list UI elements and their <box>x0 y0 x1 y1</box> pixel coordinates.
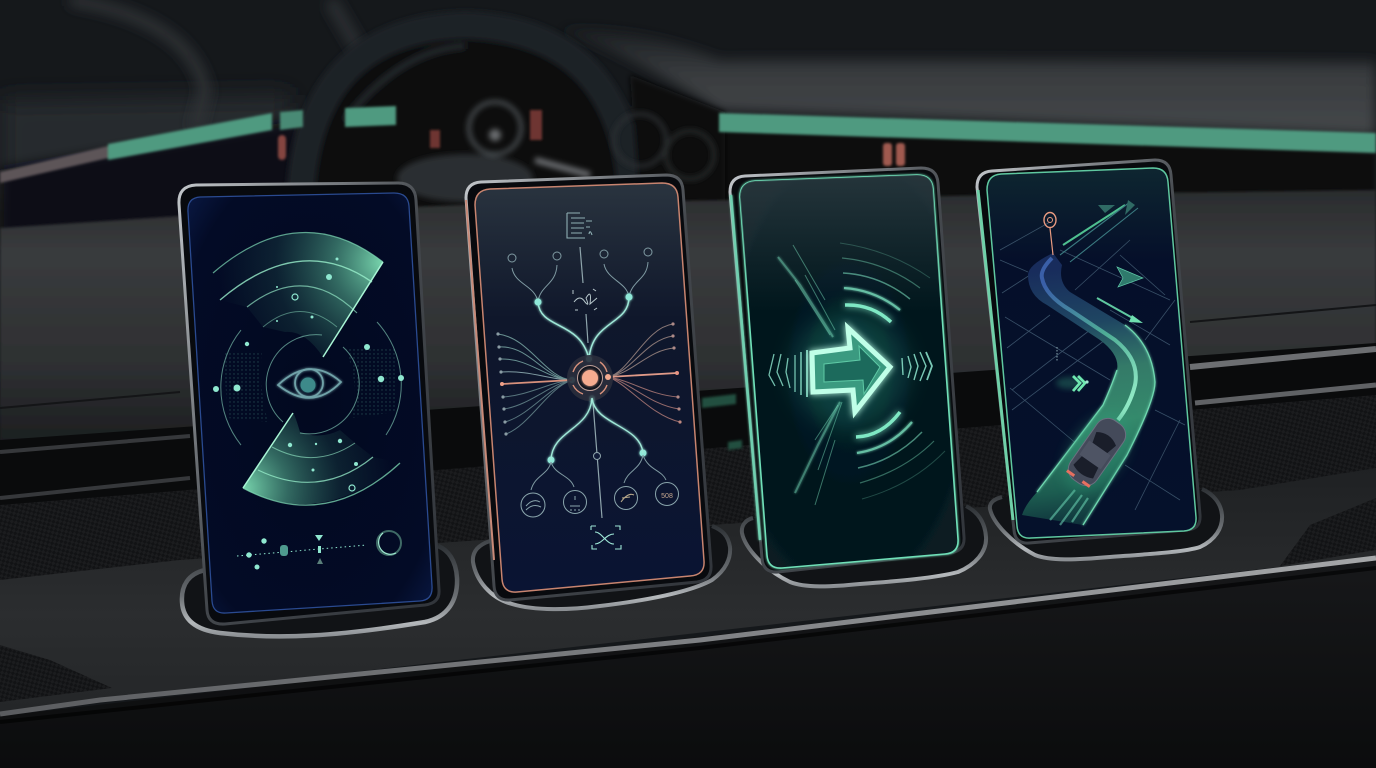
upper branches <box>508 248 652 359</box>
frame 4 <box>977 160 1200 543</box>
icon: location pin <box>1044 212 1056 255</box>
dot texture <box>223 347 396 422</box>
arrow <box>812 328 890 412</box>
map grid <box>1000 222 1185 510</box>
phone 2: branching network <box>466 175 730 609</box>
lower panel <box>0 468 1376 712</box>
top sheen <box>740 175 958 568</box>
instrument cluster <box>397 102 714 202</box>
speed streaks <box>778 245 842 505</box>
icon: navigation triangle <box>1117 267 1143 287</box>
left cabin <box>0 95 290 200</box>
dashed marker <box>1056 347 1058 362</box>
road glow <box>1037 325 1155 525</box>
dock 2 <box>473 526 730 609</box>
chevrons left <box>769 350 807 397</box>
rings <box>221 322 401 445</box>
centre connectors <box>580 247 602 518</box>
scribble icon <box>573 289 597 310</box>
frame 3 <box>730 168 964 572</box>
upper sound arcs <box>840 243 930 322</box>
green edge <box>978 190 1013 520</box>
blurred hood of dashboard <box>560 30 1376 135</box>
branch nodes <box>534 294 646 464</box>
frame 2 <box>466 175 711 600</box>
screen 2 <box>475 183 704 592</box>
lower dash <box>0 560 1376 768</box>
frame 1 <box>179 183 439 624</box>
vent reflections <box>702 394 742 450</box>
green edge <box>731 195 760 540</box>
ambient light strips <box>0 106 1376 183</box>
screen 4 <box>987 168 1196 538</box>
icon: eye <box>278 369 341 398</box>
phone 3: glowing arrow <box>730 168 986 586</box>
gauge warning lights <box>278 110 905 166</box>
upper radar sector <box>213 233 383 357</box>
carbon accents <box>0 645 112 702</box>
dash seam lines <box>0 305 1376 408</box>
vent trims <box>0 436 190 498</box>
carbon fibre band <box>0 395 1376 580</box>
screen 3 <box>740 175 958 568</box>
silver trim <box>0 558 1376 714</box>
shuffle icon <box>591 526 621 549</box>
heading arrows at top <box>1060 200 1138 262</box>
central hub <box>567 355 613 401</box>
document icon <box>567 213 592 238</box>
left fan <box>498 334 572 434</box>
dock 3 <box>742 506 986 586</box>
lower sound arcs <box>856 412 945 499</box>
phone 1: radar and eye <box>179 183 457 636</box>
peach edge <box>466 200 494 560</box>
bottom icon circles <box>521 482 678 517</box>
seat shape <box>70 0 205 130</box>
air vent <box>0 343 1376 560</box>
arrow glow <box>792 312 908 428</box>
label on icon: 508 <box>661 493 673 500</box>
dock 4 <box>990 489 1222 559</box>
main dashboard surface <box>0 190 1376 445</box>
icon: chevrons <box>1056 376 1089 391</box>
phone 4: navigation route <box>977 160 1222 559</box>
road <box>1022 253 1155 525</box>
lower radar sector <box>243 413 400 505</box>
fan endpoints <box>496 322 682 436</box>
screen 1 <box>188 193 432 613</box>
radar dots <box>213 258 404 491</box>
right fan <box>608 324 680 422</box>
road centre line <box>1042 258 1136 420</box>
lower branches <box>531 398 666 490</box>
dark zone under ambient strip <box>600 112 1376 215</box>
icon: car <box>1050 400 1144 504</box>
dock 1 <box>182 546 457 636</box>
timeline control <box>237 531 401 570</box>
car trails <box>1050 490 1088 525</box>
steering wheel <box>300 25 725 355</box>
green direction arrow <box>1097 298 1143 323</box>
chevrons right <box>902 352 932 381</box>
